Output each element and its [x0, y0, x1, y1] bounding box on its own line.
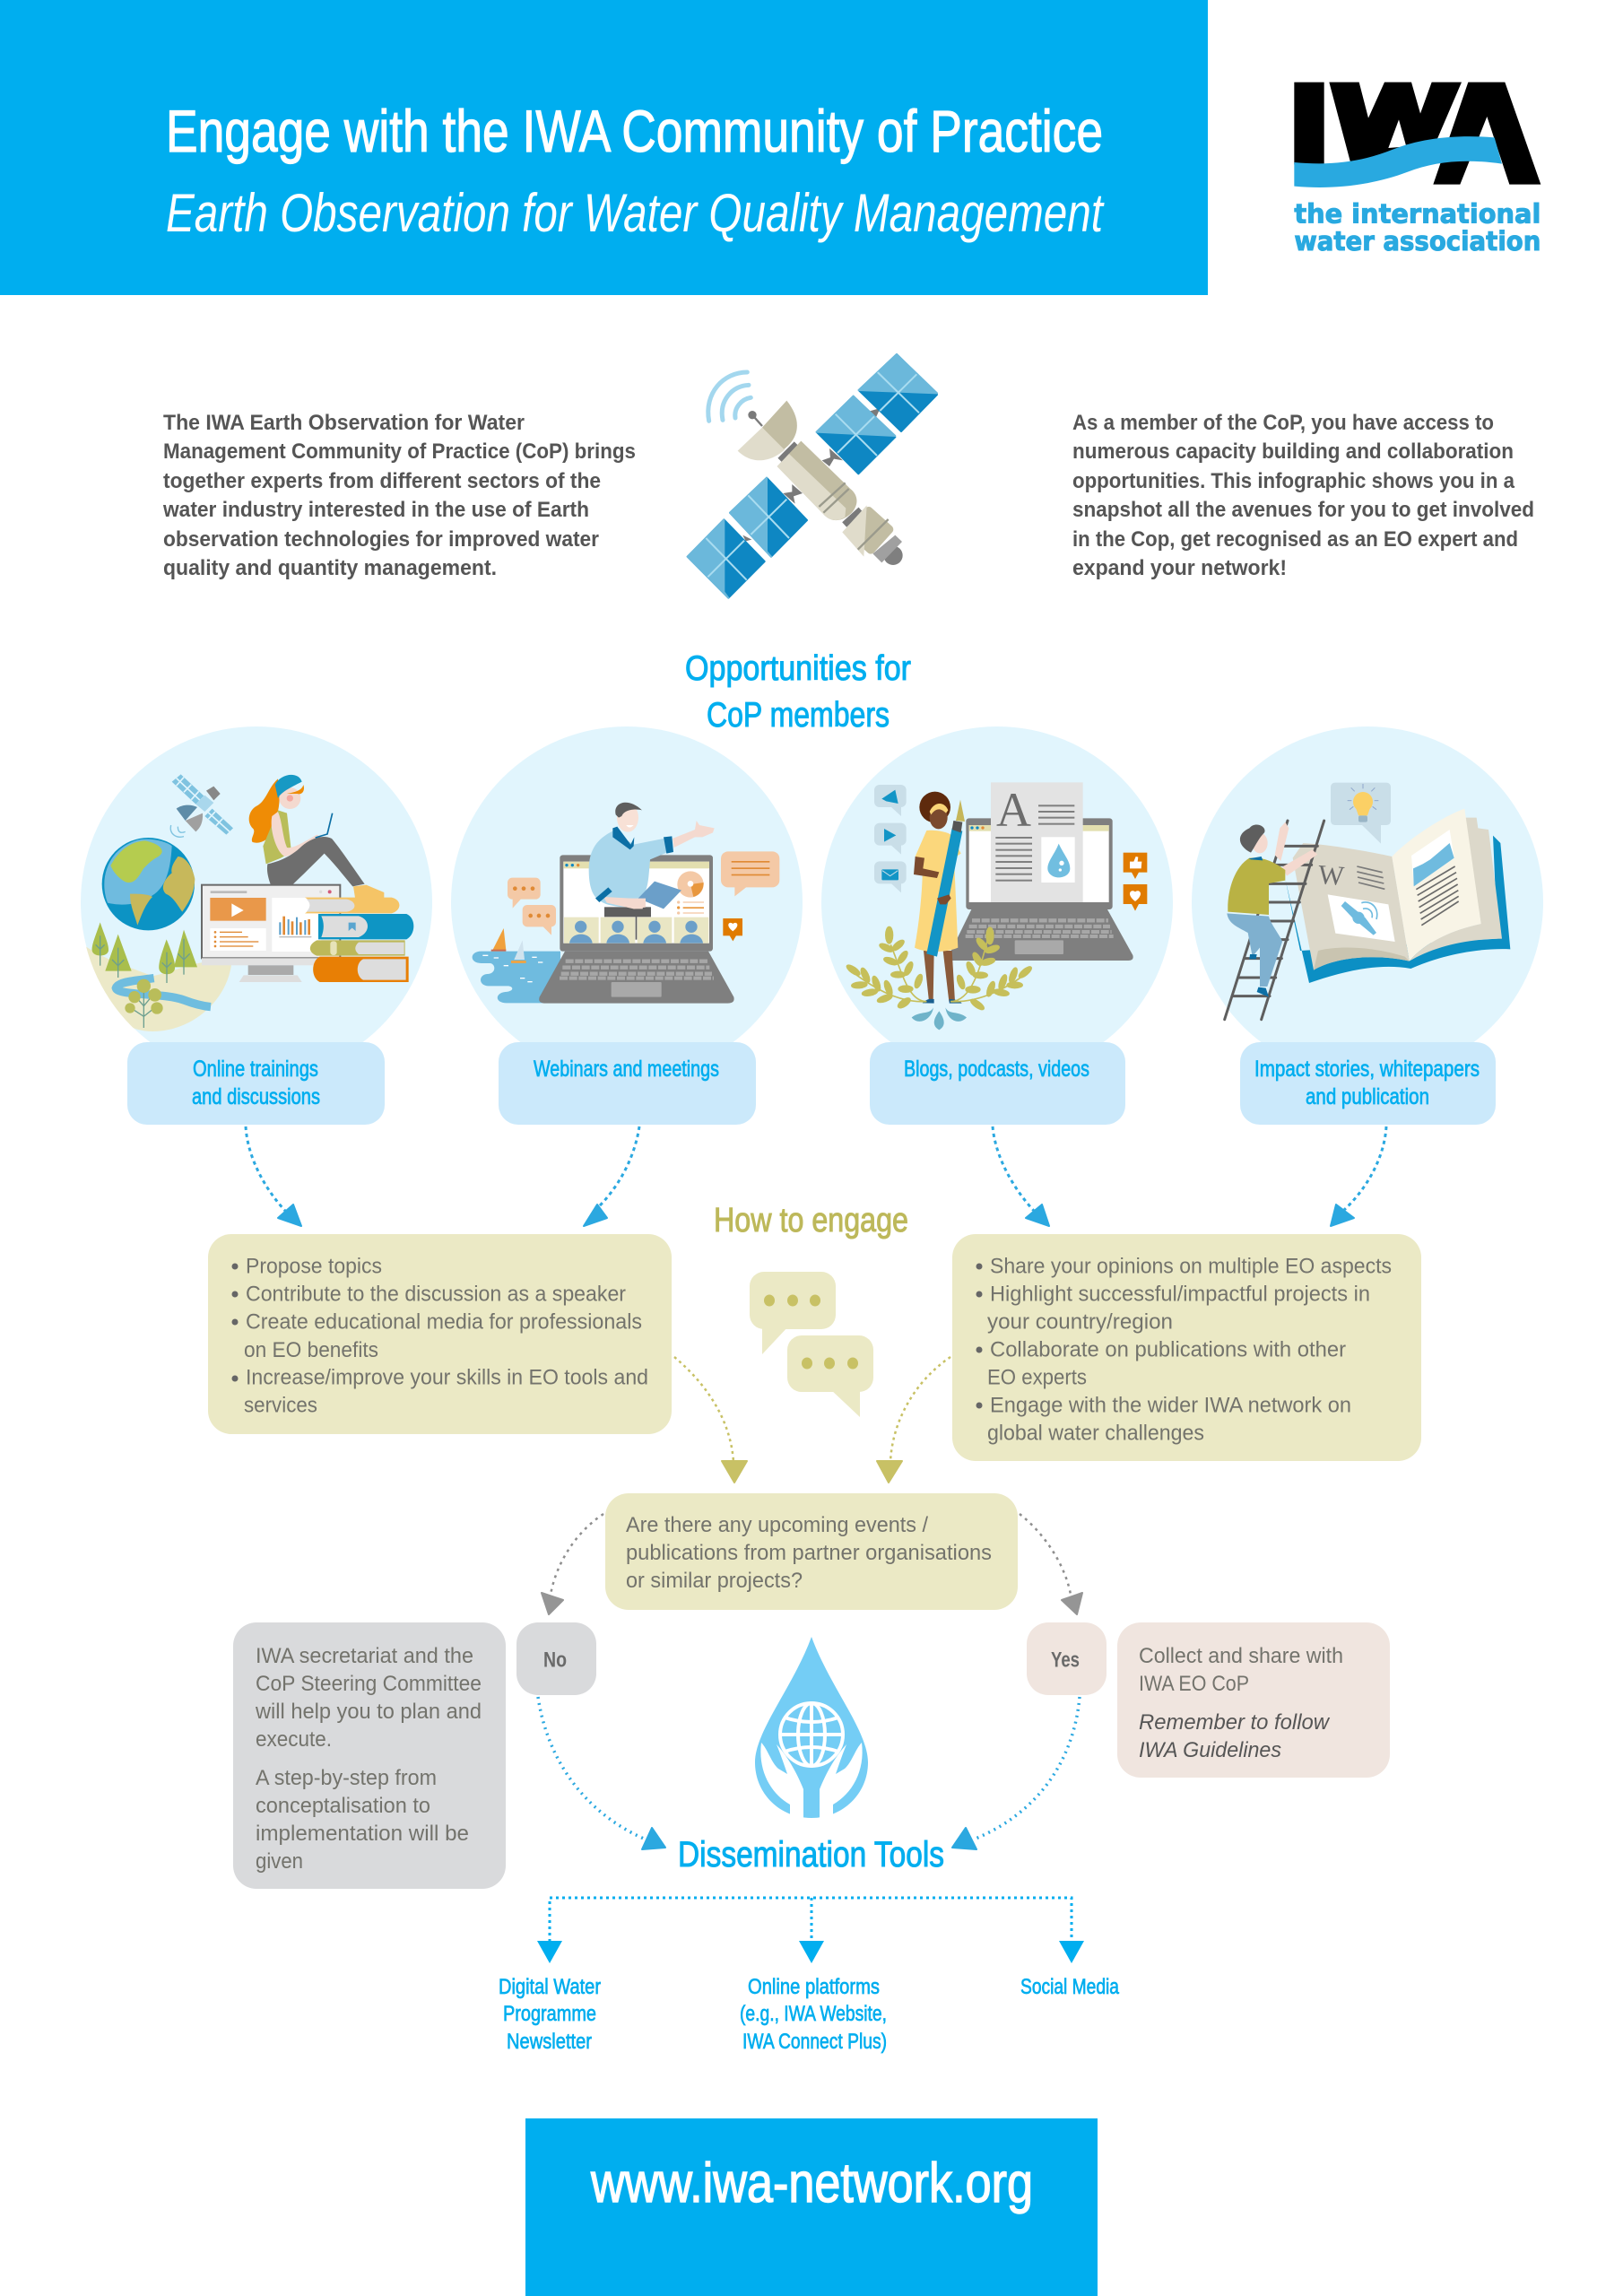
intro text left: quality and quantity management. — [163, 556, 497, 580]
panel: engage actions right: Share your opinions on multiple EO aspects — [990, 1254, 1392, 1279]
panel: engage actions left: on EO benefits — [244, 1338, 378, 1362]
icon: chat bubbles — [750, 1272, 873, 1417]
intro text left — [162, 411, 636, 580]
water drops — [912, 1007, 967, 1030]
illustration: open book and ladder — [1225, 783, 1510, 1020]
footer banner — [525, 2118, 1098, 2296]
label: online platforms: IWA Connect Plus) — [742, 2030, 887, 2054]
panel: yes explanation: Collect and share with — [1139, 1644, 1343, 1668]
subtitle: Earth Observation for Water Quality Management — [166, 183, 1105, 243]
panel: online trainings — [81, 726, 432, 1125]
intro text right: numerous capacity building and collaboration — [1072, 439, 1514, 464]
side bubbles — [874, 785, 907, 892]
illustration: woman with pen and laptop — [846, 782, 1147, 1030]
arrows: opportunities to engage — [246, 1126, 1386, 1226]
label box — [499, 1042, 756, 1125]
panel: question — [605, 1493, 1018, 1610]
panel: no explanation: given — [256, 1849, 303, 1874]
panel: impact stories — [1192, 726, 1543, 1125]
label box: and publication — [1306, 1084, 1429, 1109]
intro text right: snapshot all the avenues for you to get involved — [1072, 498, 1534, 522]
heading: opportunities — [685, 649, 911, 735]
label: digital water newsletter: Digital Water — [499, 1975, 601, 1999]
social tags — [1124, 853, 1147, 911]
intro text right: As a member of the CoP, you have access to — [1072, 411, 1494, 435]
label: online platforms: Online platforms — [748, 1975, 880, 1999]
panel: no explanation: A step-by-step from — [256, 1766, 437, 1790]
label box — [1240, 1042, 1496, 1125]
panel: no explanation — [233, 1622, 506, 1889]
header banner — [0, 0, 1208, 295]
panel: engage actions left — [208, 1234, 672, 1434]
logo: IWA — [1294, 83, 1541, 257]
intro text right: expand your network! — [1072, 556, 1287, 580]
intro text left: together experts from different sectors of the — [163, 469, 601, 493]
badge: yes — [1027, 1622, 1107, 1695]
panel: yes explanation — [1117, 1622, 1390, 1778]
illustration: open book and ladder: W — [1317, 859, 1345, 891]
panel: engage actions right — [952, 1234, 1421, 1461]
leaves — [846, 926, 1033, 1012]
intro text right: opportunities. This infographic shows you in a — [1072, 469, 1515, 493]
icon: water drop with globe and hands — [755, 1637, 868, 1818]
label box: Webinars and meetings — [534, 1057, 719, 1082]
footer banner: www.iwa-network.org — [590, 2152, 1033, 2214]
panel: blogs — [821, 726, 1173, 1125]
label: social media: Social Media — [1020, 1975, 1120, 1999]
panel: engage actions right: EO experts — [987, 1365, 1087, 1390]
panel: webinars — [451, 726, 803, 1125]
label box: Impact stories, whitepapers — [1254, 1057, 1480, 1082]
heading: how to engage: How to engage — [714, 1202, 908, 1239]
panel: engage actions left: Create educational media for professionals — [246, 1309, 642, 1335]
illustration: woman with pen and laptop: A — [996, 783, 1031, 837]
illustration: presenter on laptop — [473, 803, 779, 1004]
heading: opportunities: CoP members — [707, 696, 890, 735]
label box — [870, 1042, 1125, 1125]
panel: yes explanation: Remember to follow — [1139, 1710, 1331, 1735]
book stack — [305, 898, 413, 982]
heading: opportunities: Opportunities for — [685, 649, 911, 688]
intro text left: The IWA Earth Observation for Water — [163, 411, 525, 435]
label: digital water newsletter: Newsletter — [507, 2030, 592, 2054]
title: Engage with the IWA Community of Practice — [166, 98, 1103, 164]
heading: dissemination tools: Dissemination Tools — [678, 1835, 944, 1874]
woman — [914, 792, 965, 1004]
panel: engage actions left: Increase/improve your skills in EO tools and — [246, 1365, 648, 1390]
illustration: woman, globe, monitor and books — [85, 774, 413, 1031]
panel: engage actions left: Propose topics — [246, 1254, 382, 1279]
panel: no explanation: conceptalisation to — [256, 1794, 430, 1818]
chat bubbles — [508, 851, 779, 935]
logo: IWA: water association — [1294, 226, 1541, 257]
icon: satellite — [688, 354, 937, 598]
intro text left: observation technologies for improved water — [163, 527, 599, 552]
badge: no — [516, 1622, 596, 1695]
panel: engage actions right: Collaborate on publications with other — [990, 1338, 1346, 1361]
intro text right: in the Cop, get recognised as an EO expert and — [1072, 527, 1518, 552]
label box: and discussions — [192, 1084, 320, 1109]
label box: Online trainings — [193, 1057, 318, 1082]
panel: engage actions right: Highlight successful/impactful projects in — [990, 1283, 1370, 1306]
label box — [127, 1042, 385, 1125]
panel: engage actions left: services — [244, 1394, 317, 1417]
panel: yes explanation: IWA EO CoP — [1139, 1672, 1249, 1696]
panel: no explanation: execute. — [256, 1727, 332, 1752]
label: digital water newsletter: Programme — [503, 2002, 596, 2026]
panel: question: or similar projects? — [626, 1569, 803, 1593]
panel: question: Are there any upcoming events / — [626, 1513, 928, 1537]
arrows: engage to question — [674, 1357, 950, 1483]
panel: engage actions right: your country/region — [987, 1309, 1173, 1335]
badge: yes: Yes — [1051, 1648, 1080, 1672]
label: online platforms — [740, 1975, 887, 2054]
label box: Blogs, podcasts, videos — [904, 1057, 1089, 1082]
intro text right — [1072, 411, 1534, 580]
panel: engage actions right: global water challenges — [987, 1421, 1204, 1446]
label: digital water newsletter — [499, 1975, 601, 2054]
arrows: answers to dissemination — [538, 1697, 1080, 1849]
logo: IWA: the international — [1294, 198, 1541, 229]
panel: no explanation: implementation will be — [256, 1822, 469, 1846]
badge: no: No — [543, 1648, 567, 1672]
arrows: question to answers — [542, 1514, 1082, 1614]
panel: question: publications from partner organisations — [626, 1541, 992, 1565]
panel: engage actions left: Contribute to the discussion as a speaker — [246, 1283, 626, 1306]
panel: engage actions right: Engage with the wider IWA network on — [990, 1394, 1351, 1417]
label: online platforms: (e.g., IWA Website, — [740, 2002, 887, 2026]
intro text left: Management Community of Practice (CoP) brings — [163, 439, 636, 464]
panel: no explanation: will help you to plan and — [255, 1700, 482, 1724]
intro text left: water industry interested in the use of Earth — [162, 498, 589, 522]
arrows: dissemination tree — [537, 1898, 1084, 1963]
panel: yes explanation: IWA Guidelines — [1139, 1738, 1281, 1762]
panel: no explanation: IWA secretariat and the — [256, 1644, 473, 1668]
panel: no explanation: CoP Steering Committee — [256, 1672, 482, 1696]
woman — [249, 775, 384, 898]
